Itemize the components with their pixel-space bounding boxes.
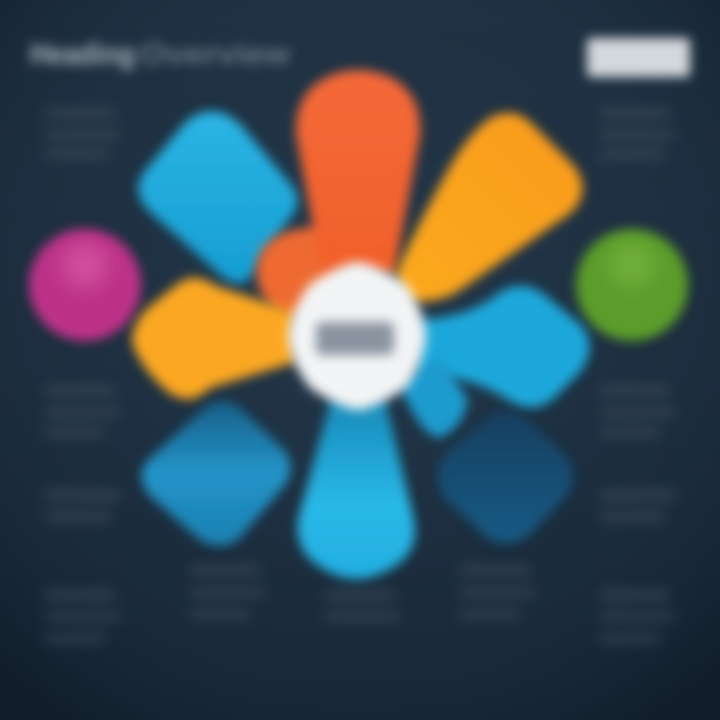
- petal: dark blue bottom-right: [437, 411, 573, 543]
- hub: white hexagon: [288, 262, 426, 410]
- petal: blue right: [415, 286, 590, 408]
- petal: amber left: [132, 278, 296, 399]
- petal: small blue: [398, 355, 468, 438]
- petal: blue top-left: [138, 111, 298, 284]
- badge: top right: [587, 38, 690, 77]
- text column: left: [45, 108, 120, 643]
- petal: orange top: [296, 70, 420, 275]
- petal: blue bottom: [298, 395, 415, 579]
- text column: right: [600, 108, 675, 643]
- hub label: [316, 322, 394, 355]
- title: Overview: [140, 38, 291, 71]
- petal: amber top-right: [396, 113, 583, 302]
- circle: green: [576, 229, 688, 341]
- circle: magenta: [29, 229, 141, 341]
- petal: orange small: [256, 224, 345, 320]
- title: Heading: [30, 38, 135, 71]
- text row: bottom labels: [190, 565, 535, 621]
- title: [30, 38, 291, 71]
- petal: blue bottom-left: [141, 401, 291, 546]
